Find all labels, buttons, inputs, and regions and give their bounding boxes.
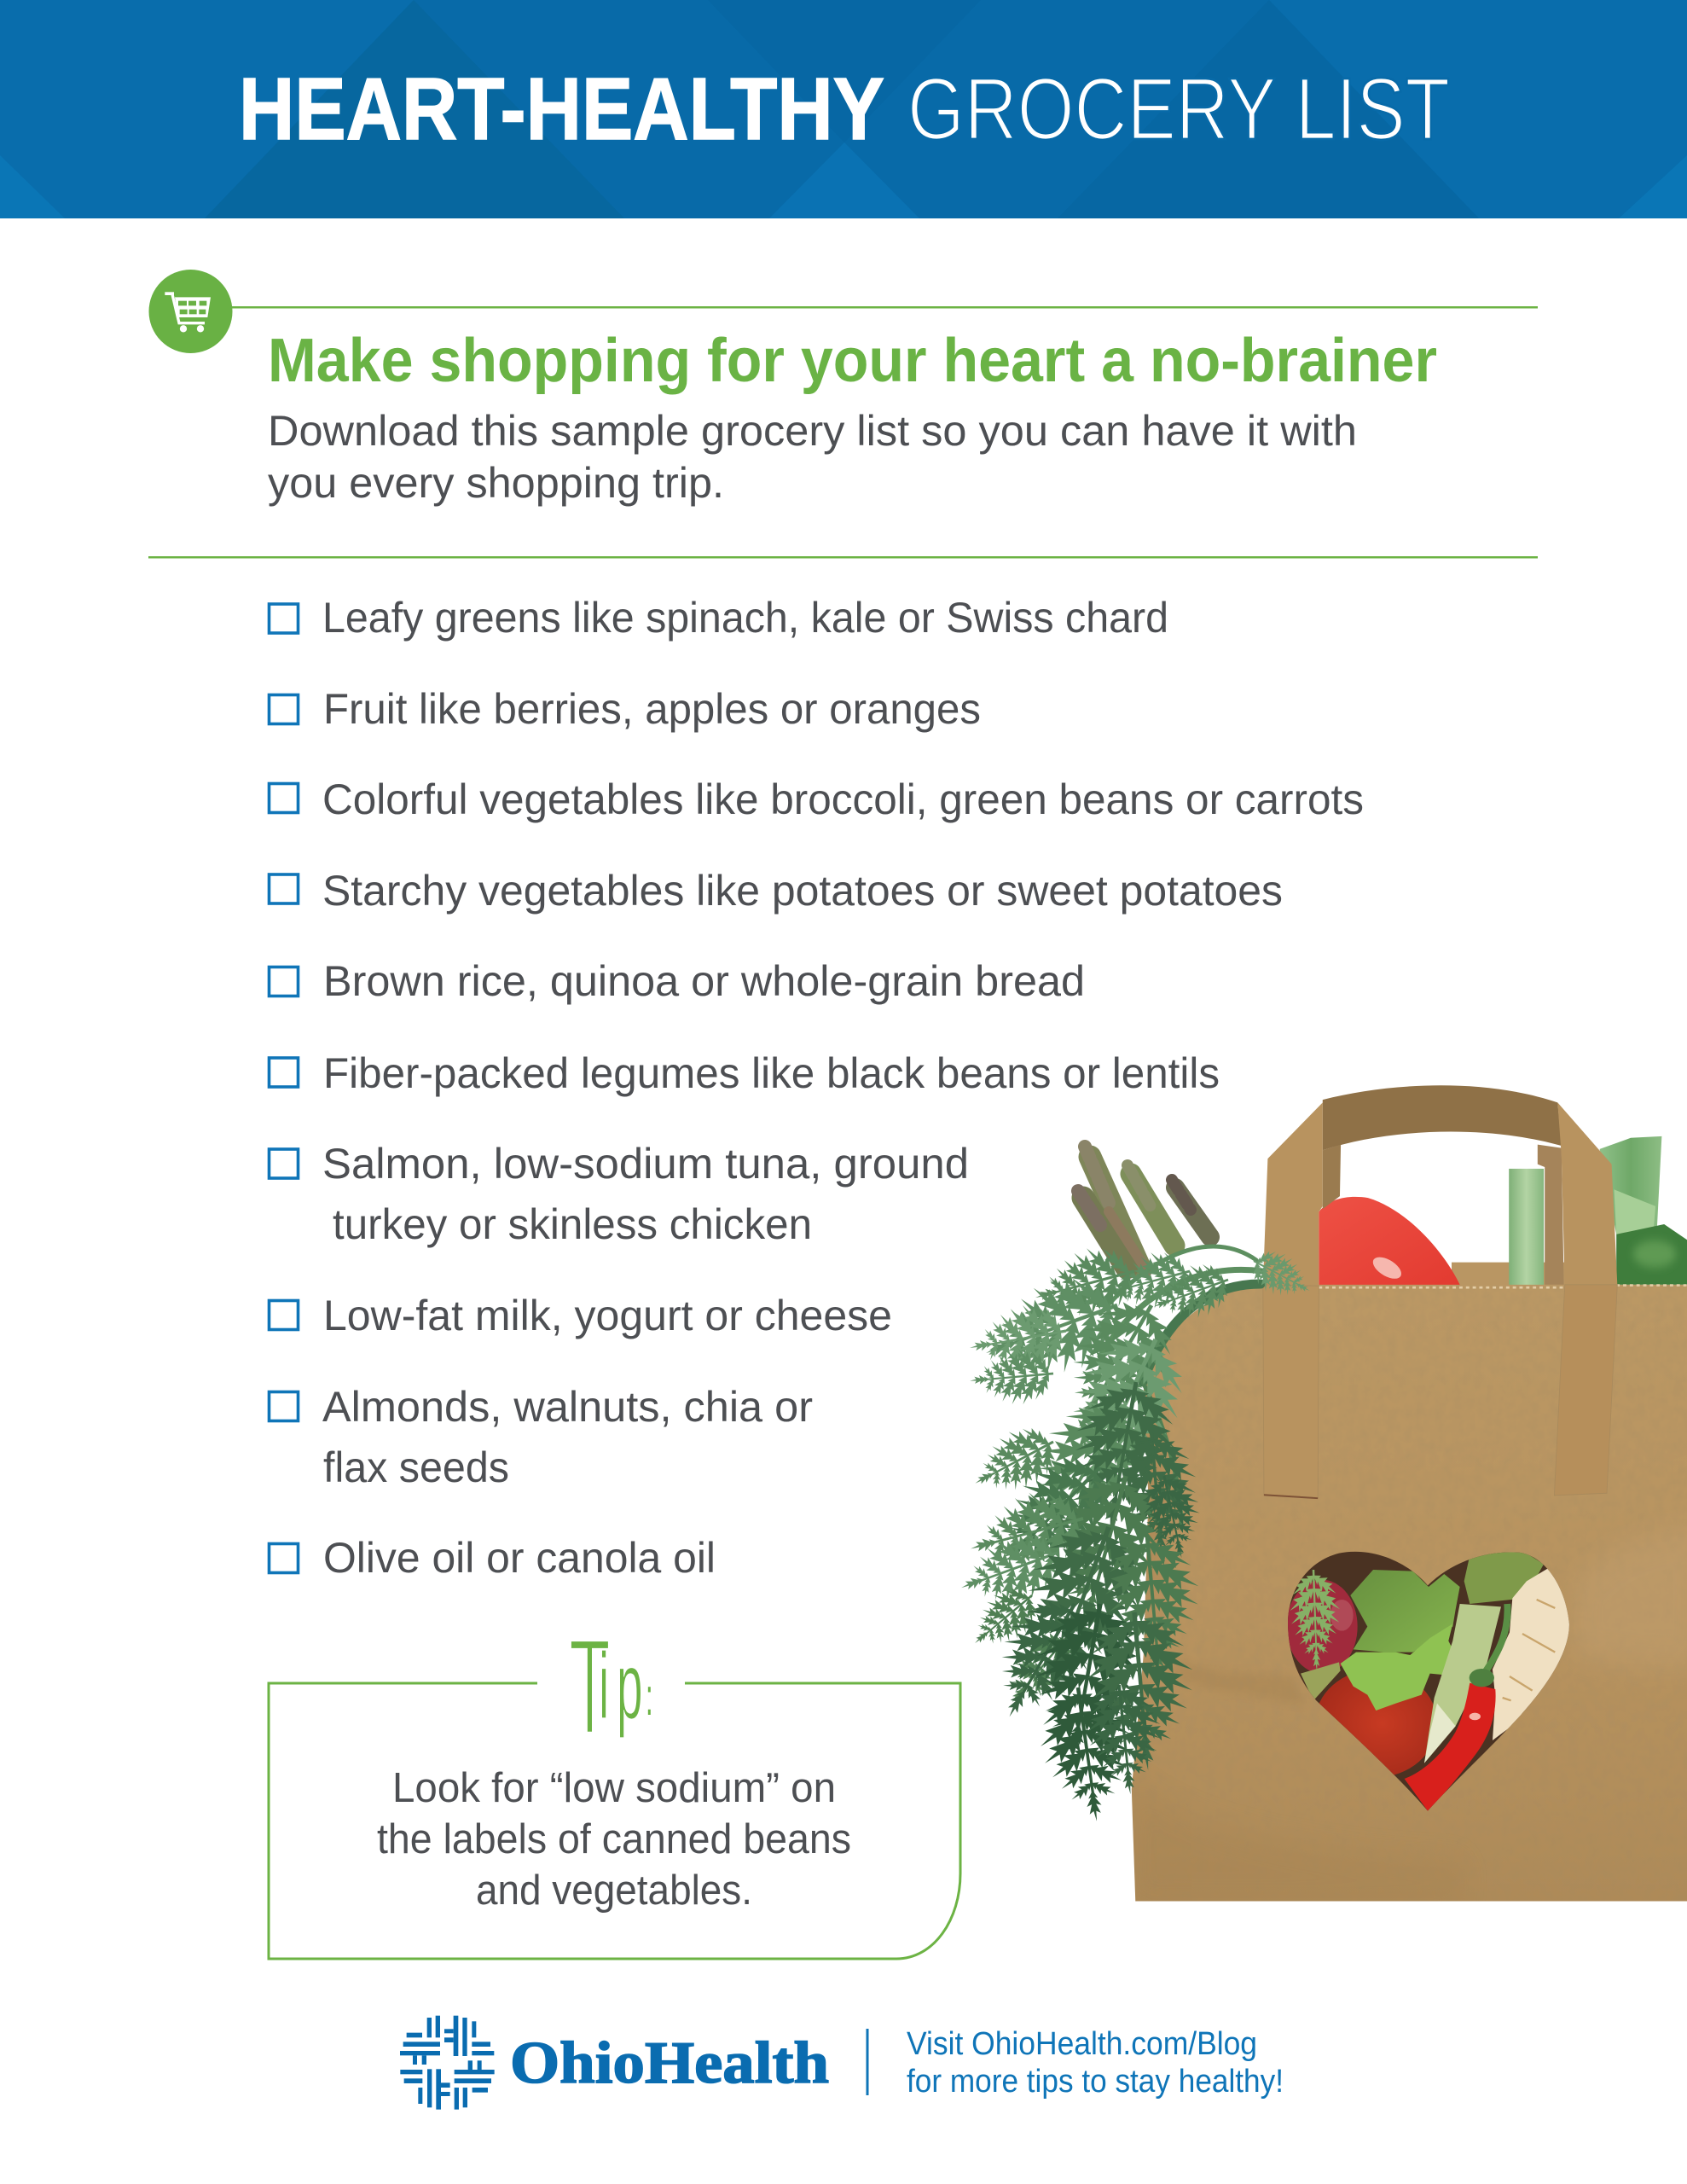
item: proteins: turkey or skinless chicken — [333, 1200, 812, 1248]
logo: OhioHealth mark — [400, 2016, 495, 2110]
left strap — [1263, 1102, 1323, 1286]
item: starchy vegetables: Starchy vegetables like potatoes or sweet potatoes — [322, 867, 1283, 915]
item: proteins — [270, 1140, 969, 1248]
item: proteins: Salmon, low-sodium tuna, ground — [322, 1140, 969, 1188]
bag and top vegetables — [1129, 1085, 1687, 1907]
item: nuts and seeds: Almonds, walnuts, chia or — [322, 1383, 813, 1431]
item: dairy: Low-fat milk, yogurt or cheese — [323, 1292, 892, 1339]
tip script heading: T — [569, 1610, 611, 1763]
item: colorful vegetables: Colorful vegetables like broccoli, green beans or carrots — [322, 775, 1364, 823]
callout: tip box — [269, 1610, 960, 1959]
heading: Make shopping for your heart a no-brainer — [268, 327, 1437, 395]
item: nuts and seeds — [270, 1383, 813, 1491]
illustration: grocery bag with vegetables — [948, 1085, 1687, 1907]
tip text — [377, 1765, 851, 1914]
footer link text — [907, 2026, 1284, 2100]
tip text: the labels of canned beans — [377, 1816, 851, 1862]
right strap — [1557, 1102, 1617, 1285]
title: GROCERY LIST — [907, 60, 1450, 158]
intro text: Download this sample grocery list so you can have it with — [268, 407, 1357, 455]
intro text — [268, 407, 1357, 507]
title — [239, 60, 1450, 158]
item: nuts and seeds: flax seeds — [323, 1443, 509, 1491]
intro section — [148, 270, 1538, 558]
tip text: Look for “low sodium” on — [392, 1765, 836, 1811]
item: leafy greens: Leafy greens like spinach, kale or Swiss chard — [322, 594, 1168, 642]
tip text: and vegetables. — [476, 1867, 752, 1914]
intro text: you every shopping trip. — [268, 459, 724, 507]
rim serration — [1319, 1286, 1687, 1287]
footer link text: for more tips to stay healthy! — [907, 2064, 1284, 2100]
grocery checklist — [270, 594, 1364, 1582]
logo wordmark: OhioHealth — [510, 2030, 829, 2096]
asparagus — [1078, 1147, 1210, 1271]
carrot greens — [948, 1233, 1321, 1828]
item: oils: Olive oil or canola oil — [323, 1534, 716, 1582]
footer — [400, 2016, 1284, 2110]
footer link text: Visit OhioHealth.com/Blog — [907, 2026, 1257, 2062]
header banner — [0, 0, 1687, 218]
item: legumes: Fiber-packed legumes like black beans or lentils — [323, 1049, 1220, 1097]
item: fruit: Fruit like berries, apples or oranges — [323, 685, 981, 733]
title: HEART-HEALTHY — [239, 60, 884, 158]
tip script heading: : — [646, 1669, 653, 1727]
icon: shopping cart in green circle — [148, 270, 232, 353]
item: grains: Brown rice, quinoa or whole-grain bread — [323, 957, 1085, 1005]
heart window with vegetables — [1282, 1544, 1578, 1817]
tip script heading: ip — [599, 1634, 643, 1739]
